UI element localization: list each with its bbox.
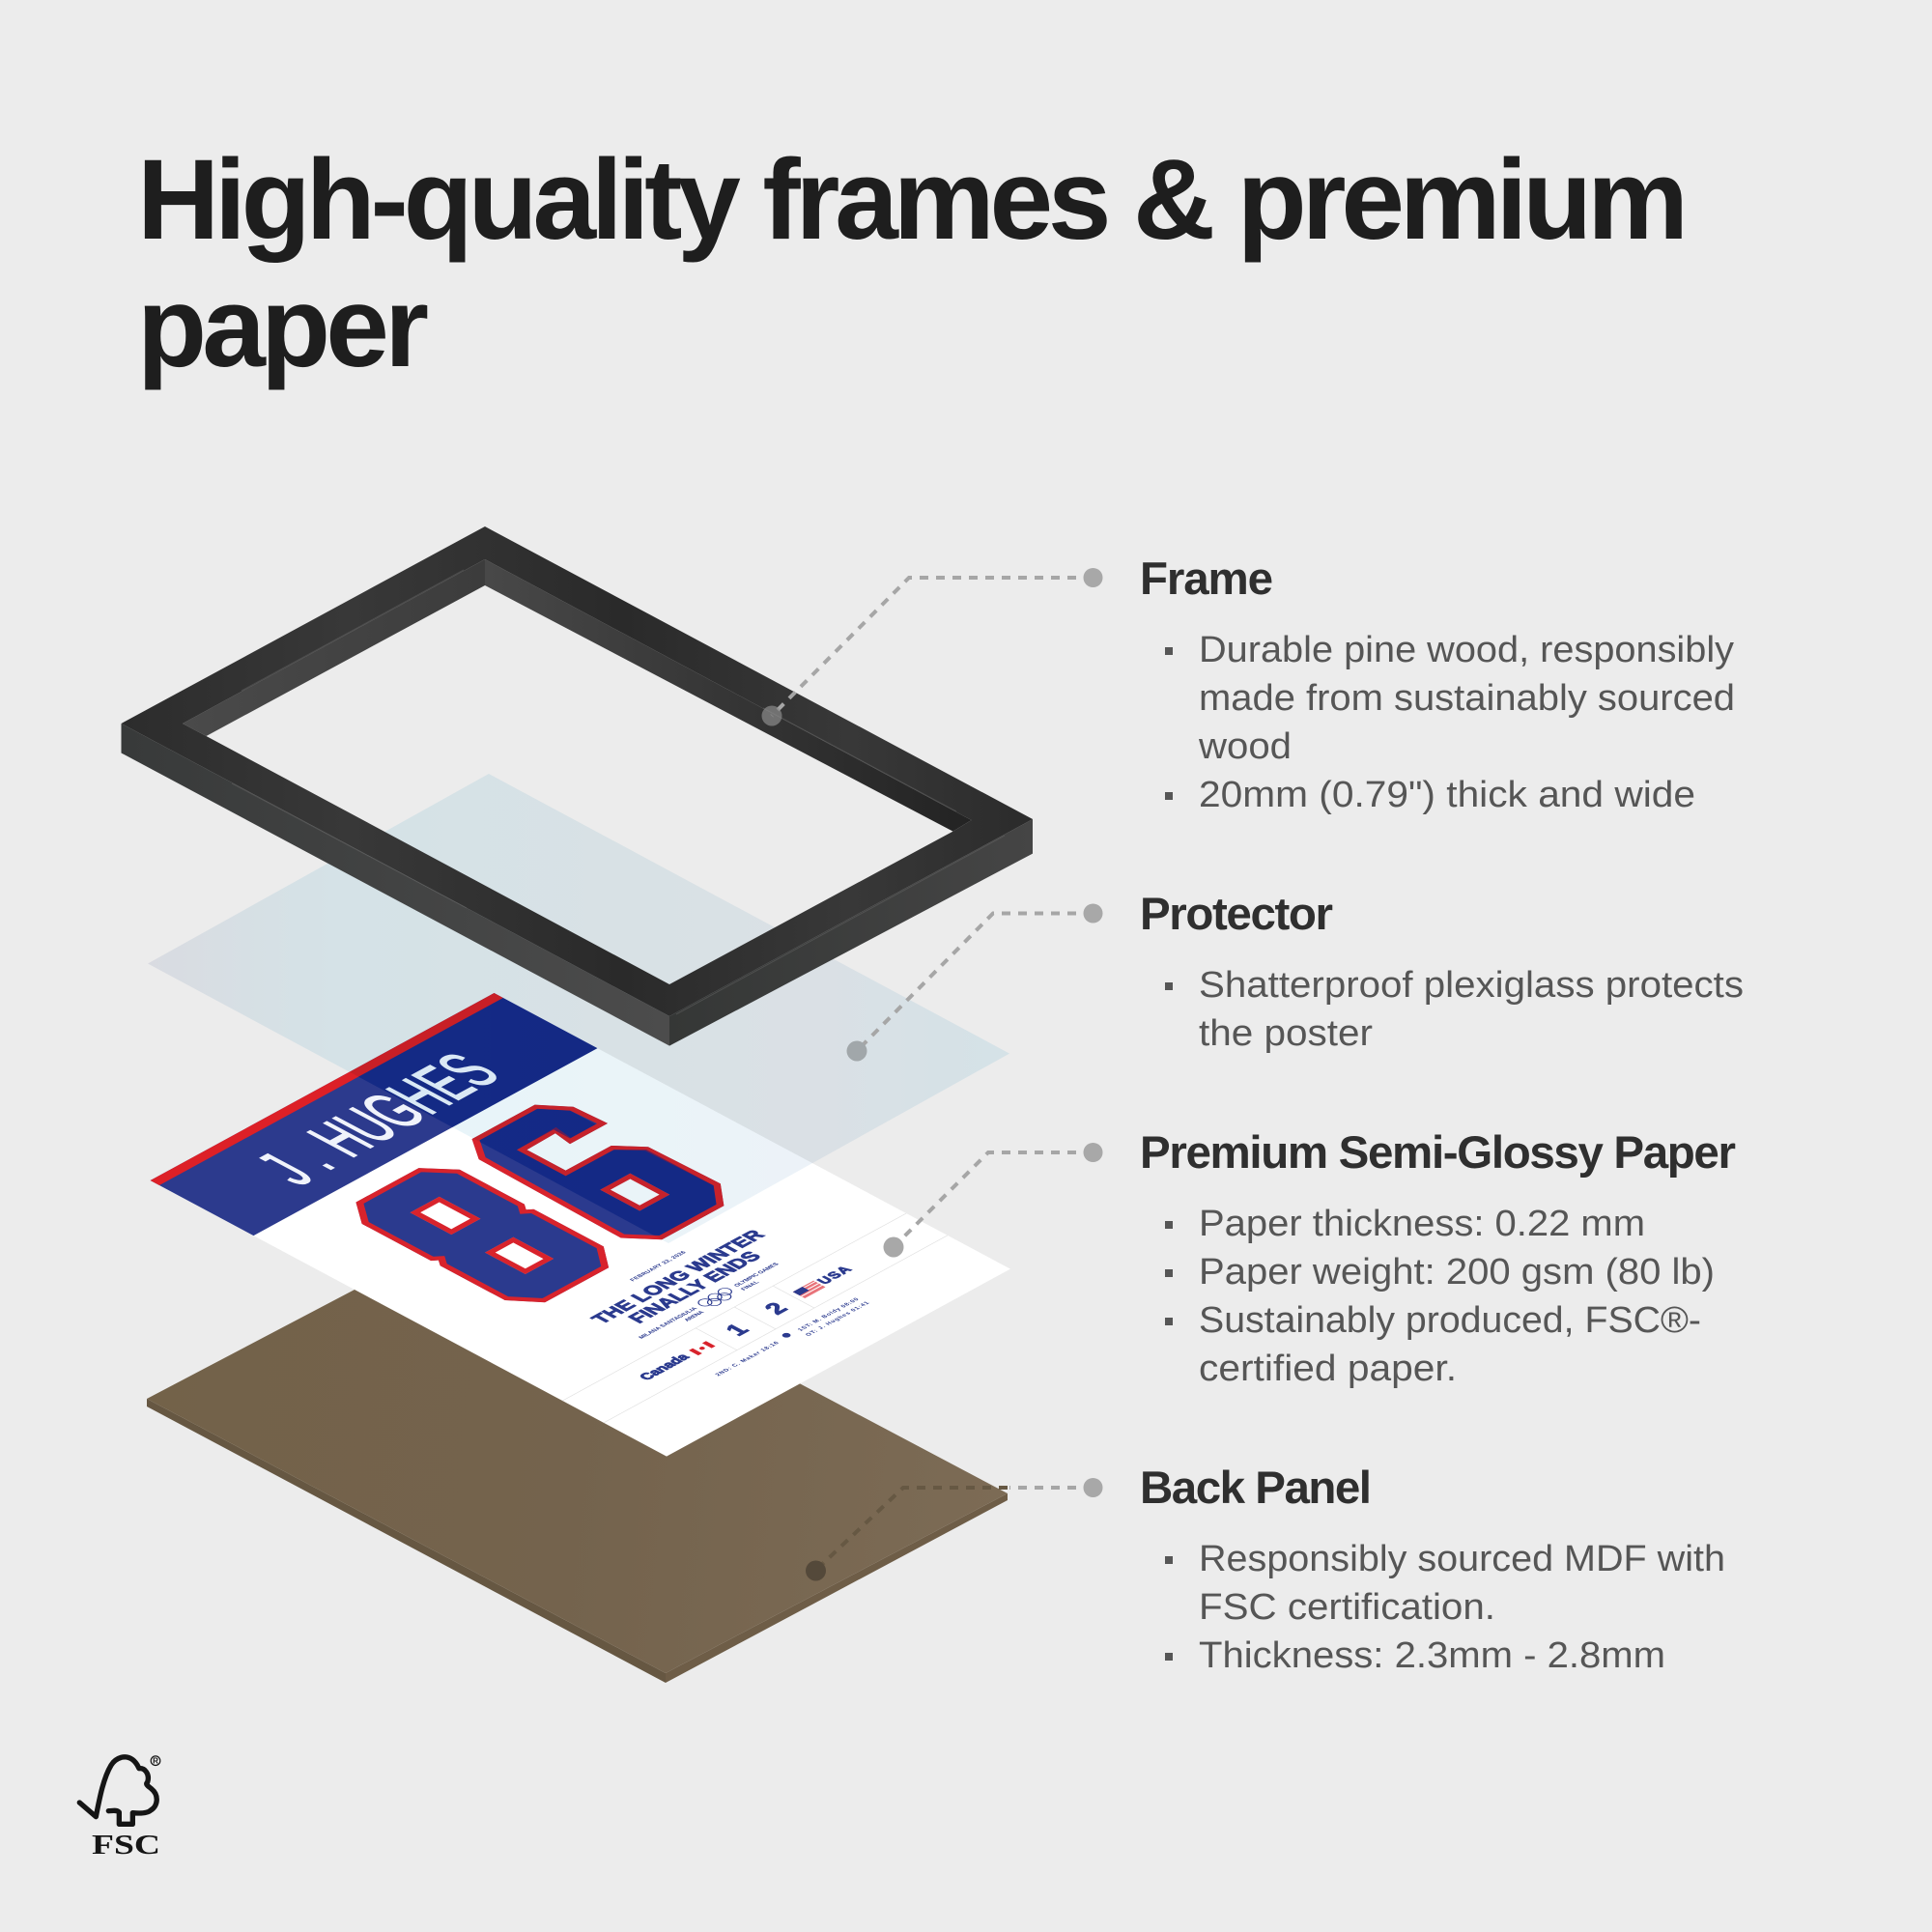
icon: FSC logo: R — [153, 1757, 158, 1766]
text block: back panel: Back Panel — [1140, 1463, 1372, 1514]
text block: paper: Premium Semi-Glossy Paper — [1140, 1127, 1736, 1179]
poster venue and olympic rings: ARENA — [684, 1310, 706, 1322]
text block: frame: Frame — [1140, 554, 1273, 605]
text block: paper: Paper thickness: 0.22 mm — [1199, 1204, 1645, 1244]
text block: frame — [1140, 554, 1735, 815]
jersey number 6 — [471, 1105, 724, 1240]
text block: frame: made from sustainably sourced — [1199, 678, 1735, 719]
poster score table — [562, 1213, 948, 1423]
frame outer walls — [122, 724, 669, 1046]
title — [137, 136, 1689, 391]
text block: protector: Shatterproof plexiglass protects — [1199, 965, 1744, 1006]
text block: protector: the poster — [1199, 1013, 1373, 1054]
back panel — [147, 1219, 1008, 1683]
connector: frame — [761, 568, 1103, 726]
connector: protector — [846, 904, 1103, 1061]
text block: back panel: Thickness: 2.3mm - 2.8mm — [1199, 1635, 1665, 1676]
poster player name: J — [240, 1145, 331, 1195]
poster score table: 2 — [759, 1299, 794, 1318]
protector — [148, 774, 1009, 1243]
glass darkening on poster — [358, 998, 717, 1236]
frame top face — [122, 526, 1033, 1016]
poster venue and olympic rings: MILANA SANTAGIULIA — [639, 1306, 699, 1340]
exploded frame diagram — [122, 526, 1033, 1683]
poster score table: Canada — [637, 1351, 694, 1382]
text block: paper: Paper weight: 200 gsm (80 lb) — [1199, 1252, 1715, 1293]
text block: protector — [1140, 889, 1744, 1054]
poster score table: 1 — [721, 1321, 754, 1339]
poster goal scorers: OT: J. Hughes 01:41 — [805, 1301, 871, 1337]
text block: back panel: FSC certification. — [1199, 1587, 1495, 1628]
jersey number 8 — [355, 1168, 609, 1302]
text block: paper: Sustainably produced, FSC®- — [1199, 1300, 1701, 1341]
poster headline: FINALLY ENDS — [624, 1249, 766, 1326]
poster headline: THE LONG WINTER — [587, 1228, 770, 1326]
connector: back panel — [806, 1478, 1103, 1580]
title: High-quality frames & premium — [137, 136, 1689, 264]
text block: protector: Protector — [1140, 889, 1333, 940]
poster goal scorers: 2ND: C. Makar 18:16 — [715, 1341, 781, 1378]
poster venue and olympic rings — [635, 1261, 787, 1344]
poster goal scorers: 1ST: M. Boldy 08:00 — [797, 1297, 862, 1332]
text block: back panel: Responsibly sourced MDF with — [1199, 1539, 1725, 1579]
text block: paper: certified paper. — [1199, 1349, 1457, 1389]
poster venue and olympic rings: OLYMPIC GAMES — [733, 1263, 781, 1288]
text block: frame: Durable pine wood, responsibly — [1199, 630, 1734, 670]
poster venue and olympic rings: FINAL — [740, 1280, 761, 1292]
poster player name — [240, 1044, 518, 1195]
text block: paper — [1140, 1127, 1736, 1389]
icon: FSC logo: FSC — [92, 1830, 160, 1861]
frame inner walls — [183, 559, 485, 736]
poster player name: . — [268, 1128, 362, 1179]
title: paper — [137, 264, 429, 391]
text block: frame: wood — [1198, 726, 1292, 767]
poster goal scorers — [712, 1294, 871, 1381]
poster score table: USA — [814, 1264, 856, 1287]
paper poster — [151, 993, 1010, 1457]
text block: frame: 20mm (0.79") thick and wide — [1199, 775, 1695, 815]
connector: paper — [883, 1143, 1103, 1258]
poster player name: HUGHES — [291, 1044, 518, 1167]
frame — [122, 526, 1033, 1046]
poster headline: FEBRUARY 22, 2026 — [630, 1250, 689, 1283]
poster name band — [151, 993, 597, 1236]
text block: back panel — [1140, 1463, 1725, 1676]
icon: FSC logo — [79, 1756, 160, 1861]
